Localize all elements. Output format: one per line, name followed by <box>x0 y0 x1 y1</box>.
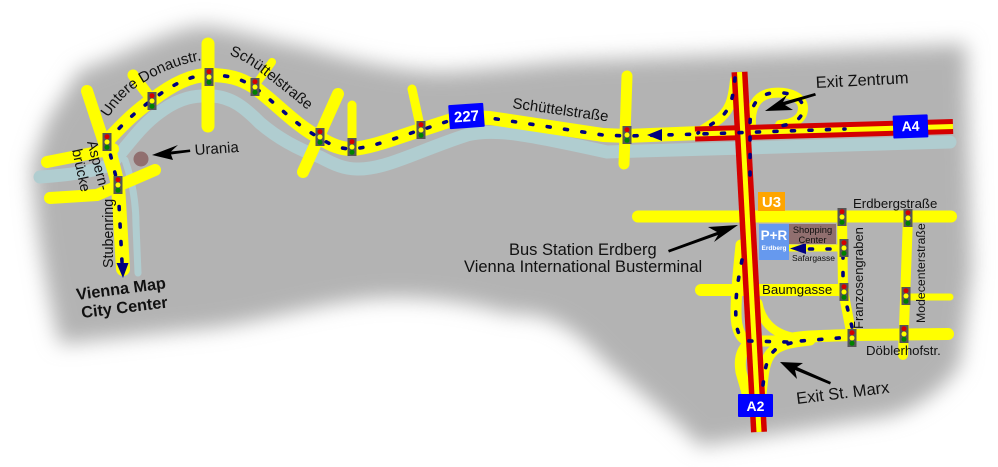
arrow: Exit St. Marx <box>780 362 831 384</box>
label: Exit St. Marx: Exit St. Marx <box>795 379 891 408</box>
sign: 227 <box>448 103 485 129</box>
label: Aspern-brücke <box>68 139 112 193</box>
sign: U3: U3 <box>762 194 781 211</box>
direction arrows <box>116 129 806 278</box>
sign: A4 <box>893 114 928 139</box>
label: Bus Station: Bus Station Erdberg <box>509 241 657 259</box>
sign: A2 <box>738 394 773 417</box>
sign: U3 <box>758 192 785 211</box>
arrow: Urania <box>152 145 190 160</box>
sign: P+R Erdberg <box>759 224 789 260</box>
label: Aspern-brücke: brücke <box>68 148 93 193</box>
main road yellow <box>107 75 700 269</box>
river <box>40 96 950 273</box>
label: Erdbergstraße: Erdbergstraße <box>853 196 937 211</box>
ramps <box>698 80 810 400</box>
Erdberg street grid <box>638 216 951 355</box>
route dashes <box>107 75 852 385</box>
label: Bus Station: Vienna International Busterminal <box>464 258 702 276</box>
label: Bus Station <box>464 241 702 276</box>
label: Vienna Map City Center <box>75 274 169 322</box>
side roads <box>47 44 627 198</box>
sign: P+R Erdberg: Erdberg <box>762 245 786 252</box>
arrow: bus station <box>668 225 738 252</box>
label: Stubenring: Stubenring <box>101 199 117 268</box>
arrow: Exit Zentrum <box>765 93 816 111</box>
label: Exit Zentrum: Exit Zentrum <box>815 69 909 92</box>
marker: Urania <box>134 152 148 166</box>
motorway A2 <box>740 72 759 432</box>
label: Urania: Urania <box>194 139 240 159</box>
sign: P+R Erdberg: P+R <box>761 228 788 243</box>
sign: Shopping Center: Center <box>799 235 826 245</box>
label: Untere Donaustr.: Untere Donaustr. <box>100 52 200 116</box>
sign: 227: 227 <box>453 108 480 126</box>
sign: A2: A2 <box>747 398 765 414</box>
label: Franzosengraben: Franzosengraben <box>851 227 866 329</box>
sign: Shopping Center <box>789 224 836 245</box>
sign: Shopping Center: Shopping <box>793 225 832 235</box>
label: Safargasse: Safargasse <box>792 253 835 263</box>
traffic lights <box>102 68 912 347</box>
label: Schüttelstraße: Schüttelstraße <box>511 95 610 125</box>
sign: A4: A4 <box>901 118 920 134</box>
label: Schüttelstraße curved: Schüttelstraße <box>230 46 311 109</box>
label: Vienna Map City Center: Vienna Map <box>75 274 167 304</box>
label: Modecenterstraße: Modecenterstraße <box>914 223 928 323</box>
label: Baumgasse: Baumgasse <box>762 282 832 297</box>
label: Vienna Map City Center: City Center <box>80 293 169 322</box>
label: Aspern-brücke: Aspern- <box>83 139 112 192</box>
motorway A4 <box>695 126 953 134</box>
label: Döblerhofstr.: Döblerhofstr. <box>866 343 941 358</box>
